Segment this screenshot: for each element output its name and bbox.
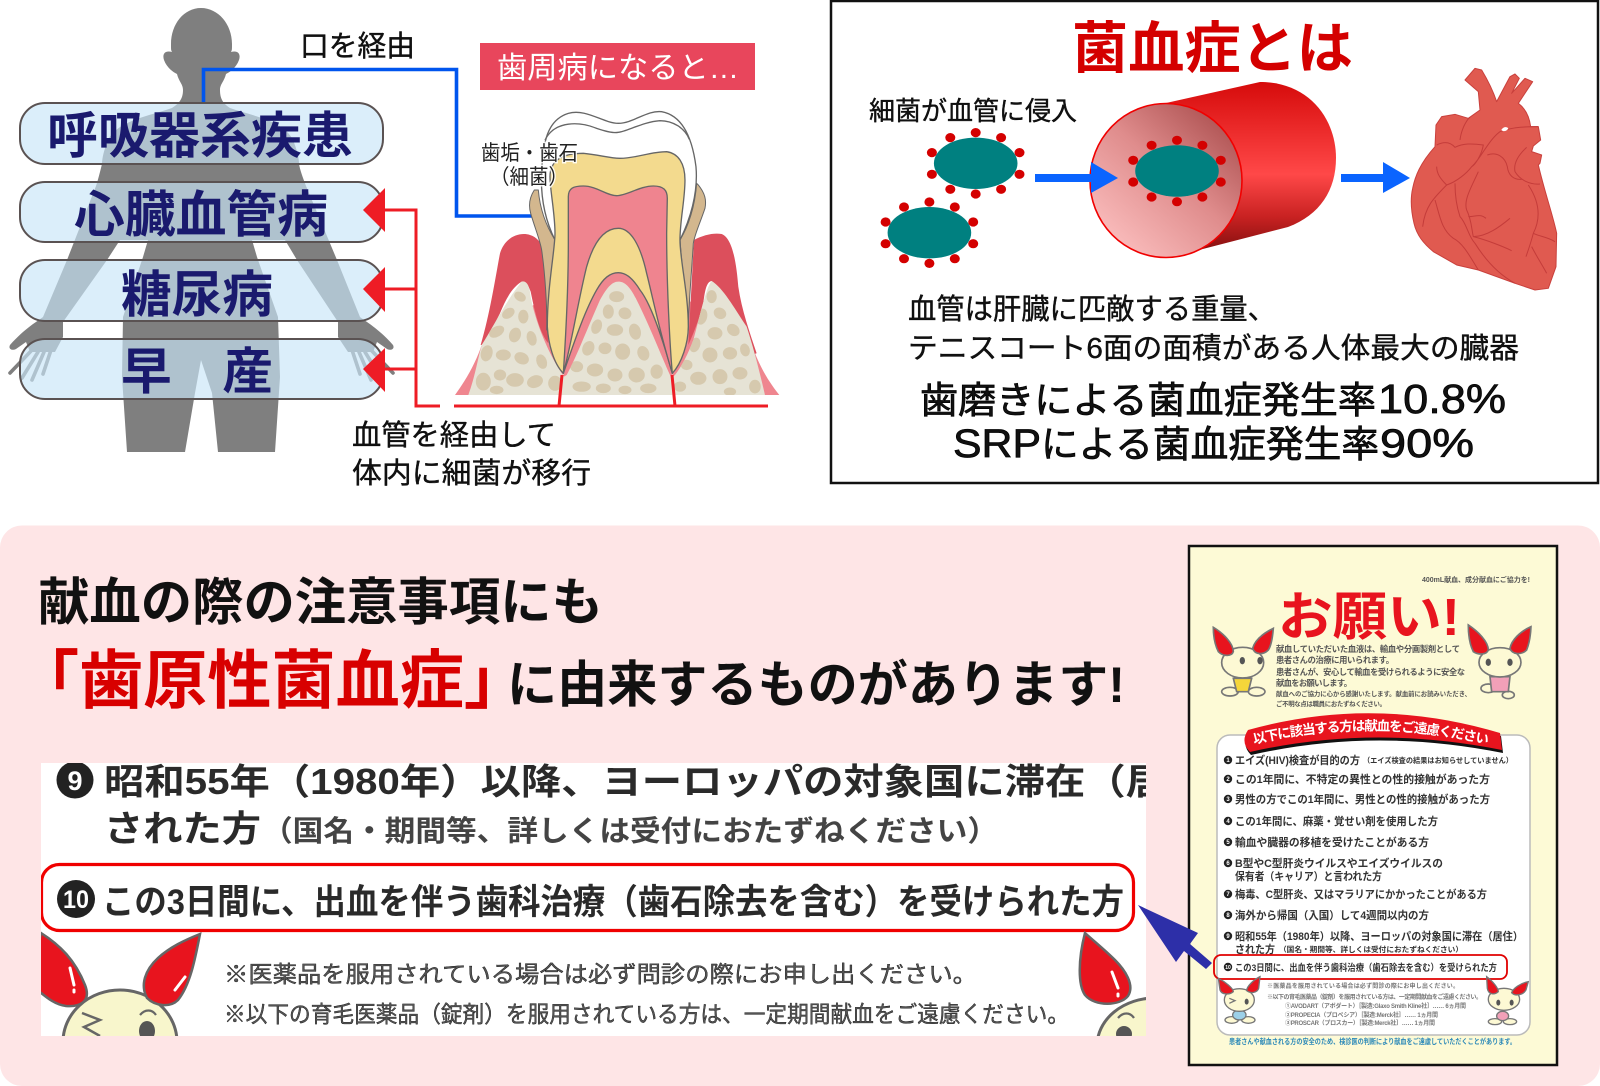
enlarged poster excerpt: [41, 763, 1146, 1036]
list number digits: 8: [1226, 913, 1230, 919]
poster list: この1年間に、不特定の異性との性的接触があった方: [1235, 772, 1490, 786]
list number digits: 10: [1225, 965, 1231, 971]
poster ribbon heading: [1244, 713, 1503, 755]
panel: blood donation notice: [0, 526, 1600, 1086]
poster intro text: 患者さんが、安心して輸血を受けられるように安全な: [1276, 667, 1465, 677]
heading badge: periodontal disease: [480, 43, 755, 90]
label: plaque and tartar: [481, 142, 578, 189]
list number digits: 1: [1226, 758, 1230, 764]
poster intro text: 献血へのご協力に心から感謝いたします。献血前にお読みいただき、: [1276, 689, 1471, 698]
arrow: bacterium into vessel: [1035, 162, 1118, 193]
panel: oral bacteria spreading through the body: [9, 8, 779, 490]
text: bacteremia incidence rates: 90%: [1380, 422, 1474, 466]
heading: odontogenic bacteremia: 「歯原性菌血症」: [15, 645, 528, 717]
poster list: エイズ(HIV)検査が目的の方: [1235, 753, 1360, 767]
list number digits: 5: [1226, 840, 1230, 846]
pill: premature birth: 早 産: [121, 344, 273, 400]
body silhouette: [9, 8, 394, 452]
poster list panel: [1217, 735, 1530, 1035]
enamel: [541, 112, 696, 260]
poster title: お願い!: [1278, 589, 1460, 647]
dental pulp: [563, 186, 672, 373]
poster list: 梅毒、C型肝炎、又はマラリアにかかったことがある方: [1235, 887, 1487, 901]
caption: bacteria move through the bloodstream: 血管を経由して: [352, 419, 556, 452]
highlighted item 10: [42, 864, 1134, 930]
poster tagline: 400mL献血、成分献血にご協力を!: [1422, 575, 1530, 584]
pill: premature birth: [20, 339, 383, 400]
gum base: [455, 272, 779, 395]
poster list: （エイズ検査の結果はお知らせしていません）: [1363, 756, 1513, 765]
heading continuation: に由来するものがあります!: [507, 657, 1125, 713]
poster list: この1年間に、麻薬・覚せい剤を使用した方: [1235, 814, 1438, 828]
poster list: 輸血や臓器の移植を受けたことがある方: [1235, 835, 1429, 849]
icon: bacterium 1: [927, 128, 1024, 199]
poster intro text: 献血していただいた血液は、輸血や分画製剤として: [1276, 644, 1460, 654]
icon: bacterium in vessel: [1128, 136, 1226, 206]
icon: heart: [1411, 68, 1557, 290]
text: blood vessel facts: [908, 293, 1519, 365]
arrows: bloodstream route to organs: [363, 188, 768, 406]
list number digits: 4: [1226, 819, 1230, 825]
poster intro text: 献血をお願いします。: [1276, 678, 1352, 688]
poster list: 昭和55年（1980年）以降、ヨーロッパの対象国に滞在（居住）: [1235, 929, 1523, 943]
panel: what is bacteremia: [831, 1, 1598, 483]
plaque and tartar: [530, 183, 706, 330]
label: plaque and tartar: （細菌）: [490, 166, 568, 189]
list number digits: 9: [1226, 934, 1230, 940]
poster list: 海外から帰国（入国）して4週間以内の方: [1235, 908, 1429, 922]
poster list: 保有者（キャリア）と言われた方: [1235, 869, 1382, 883]
highlighted item 10: 10: [63, 886, 89, 914]
poster lower notes: ※医薬品を服用されている場合は必ず問診の際にお申し出ください。: [1267, 982, 1459, 990]
poster highlight box: [1214, 955, 1507, 979]
poster footer: 患者さんや献血される方の安全のため、検診医の判断により献血をご遠慮していただくことがあります。: [1229, 1037, 1516, 1046]
pill: diabetes: [20, 260, 383, 323]
inflamed gum: [481, 234, 757, 355]
item 9: された方: [104, 808, 261, 849]
dentin: [547, 152, 688, 373]
poster intro text: ご不明な点は職員におたずねください。: [1276, 699, 1386, 708]
illustration: tooth with periodontal disease: [455, 112, 779, 397]
poster intro text: 患者さんの治療に用いられます。: [1276, 655, 1394, 665]
list number digits: [1225, 758, 1231, 971]
pill: diabetes: 糖尿病: [121, 267, 273, 323]
heading: blood donation cautions: 献血の際の注意事項にも: [38, 574, 603, 631]
poster lower notes: ③PROSCAR（プロスカー）［製造:Merck社］…… 1ヵ月間: [1285, 1019, 1435, 1027]
medication notes: [224, 961, 1069, 1027]
poster: please donate safely: [1188, 544, 1558, 1066]
poster intro text: [1276, 644, 1471, 708]
text: blood vessel facts: テニスコート6面の面積がある人体最大の臓器: [908, 332, 1519, 365]
poster list: B型やC型肝炎ウイルスやエイズウイルスの: [1235, 856, 1443, 870]
label: bacteria enter blood vessel: 細菌が血管に侵入: [869, 96, 1077, 126]
poster list: 男性の方でこの1年間に、男性との性的接触があった方: [1235, 792, 1490, 806]
caption: bacteria move through the bloodstream: 体内に細菌が移行: [352, 457, 591, 490]
text: blood vessel facts: 血管は肝臓に匹敵する重量、: [908, 293, 1276, 326]
line: via the mouth: [204, 70, 533, 216]
icon: bacterium 2: [881, 197, 978, 268]
poster lower notes: ②PROPECIA（プロペシア）［製造:Merck社］…… 1ヵ月間: [1285, 1011, 1438, 1019]
list number digits: 2: [1226, 777, 1230, 783]
title: 菌血症とは: [1072, 17, 1353, 80]
list number digits: 6: [1226, 861, 1230, 867]
mascot: left: [41, 932, 202, 1036]
alveolar bone: [468, 281, 765, 395]
icon: blood vessel cross-section: [1090, 82, 1336, 258]
label: via the mouth: 口を経由: [300, 30, 415, 63]
poster lower notes: [1267, 982, 1482, 1027]
poster list: この3日間に、出血を伴う歯科治療（歯石除去を含む）を受けられた方: [1235, 962, 1497, 973]
text: bacteremia incidence rates: による菌血症発生率: [1041, 424, 1379, 465]
list number markers: [1224, 756, 1232, 971]
poster list: （国名・期間等、詳しくは受付におたずねください）: [1279, 945, 1463, 954]
pill: cardiovascular disease: [20, 182, 383, 243]
highlighted item 10: この3日間に、出血を伴う歯科治療（歯石除去を含む）を受けられた方: [102, 883, 1124, 922]
text: bacteremia incidence rates: 歯磨きによる菌血症発生率: [920, 380, 1376, 421]
caption: bacteria move through the bloodstream: [352, 419, 591, 490]
text: bacteremia incidence rates: 10.8%: [1378, 376, 1506, 422]
text: bacteremia incidence rates: SRP: [953, 422, 1041, 466]
poster list: された方: [1235, 942, 1275, 956]
item 9: 9: [67, 766, 83, 796]
item 9: 昭和55年（1980年）以降、ヨーロッパの対象国に滞在（居: [104, 761, 1166, 802]
poster mascots lower: [1218, 977, 1528, 1025]
poster lower notes: ①AVODART（アボダート）［製造:Glaxo Smith Kline社］…… 6ヵ月間: [1285, 1002, 1466, 1010]
pill: cardiovascular disease: 心臓血管病: [74, 187, 328, 243]
label: plaque and tartar: 歯垢・歯石: [481, 142, 578, 165]
arrow: excerpt source in poster: [1138, 905, 1212, 969]
poster lower notes: ※以下の育毛医薬品（錠剤）を服用されている方は、一定期間献血をご遠慮ください。: [1267, 993, 1482, 1001]
text: bacteremia incidence rates: [920, 376, 1506, 466]
arrow: vessel to heart: [1341, 162, 1410, 193]
pill: respiratory disease: 呼吸器系疾患: [47, 108, 353, 164]
mascot: right: [1078, 930, 1146, 1036]
poster mascots upper: [1213, 625, 1531, 699]
medication notes: ※医薬品を服用されている場合は必ず問診の際にお申し出ください。: [224, 961, 977, 987]
list number digits: 7: [1226, 892, 1230, 898]
poster list: [1224, 753, 1523, 973]
heading badge: periodontal disease: 歯周病になると…: [497, 52, 739, 85]
medication notes: ※以下の育毛医薬品（錠剤）を服用されている方は、一定期間献血をご遠慮ください。: [224, 1001, 1069, 1027]
item 9: [56, 761, 1166, 849]
list number digits: 3: [1226, 797, 1230, 803]
poster ribbon heading: 以下に該当する方は献血をご遠慮ください: [1254, 719, 1488, 744]
item 9: （国名・期間等、詳しくは受付におたずねください）: [262, 815, 998, 848]
